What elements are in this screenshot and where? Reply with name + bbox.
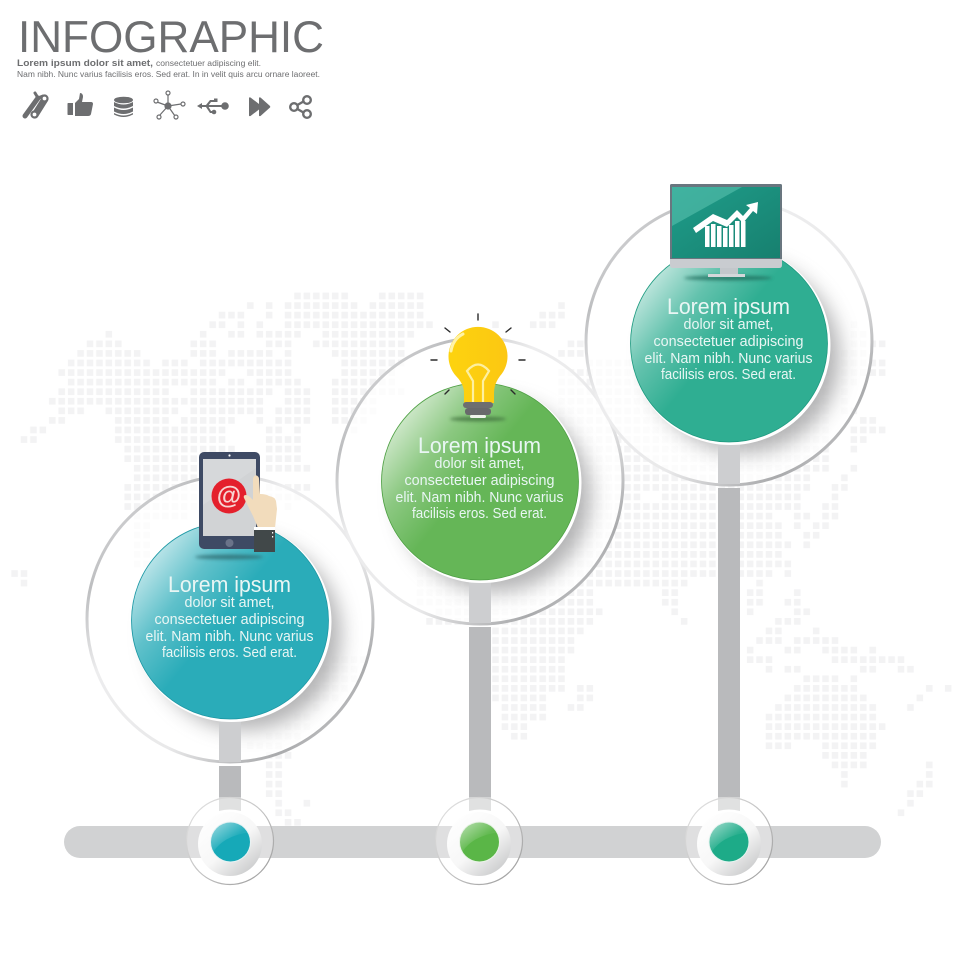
disc 3 text: dolor sit amet,	[684, 317, 774, 333]
timeline node 1	[186, 798, 274, 884]
disc 3 text: facilisis eros. Sed erat.	[661, 367, 796, 383]
disc 2 text: dolor sit amet,	[434, 456, 524, 472]
icon: thumbs up	[68, 93, 93, 116]
icon: monitor with rising chart	[670, 184, 782, 280]
connector stem 3	[718, 488, 740, 811]
light rays	[431, 314, 525, 394]
icon: usb symbol	[197, 98, 229, 114]
text disc 3	[630, 245, 830, 445]
subtitle text block: Nam nibh. Nunc varius facilisis eros. Sed erat. In in velit quis arcu ornare laoreet.	[17, 69, 320, 79]
icon: tablet with hand and at sign	[195, 452, 277, 560]
timeline node 3	[686, 798, 772, 884]
disc shadow 1	[149, 538, 341, 730]
disc 2 text: consectetuer adipiscing	[404, 473, 554, 489]
disc 3 text: elit. Nam nibh. Nunc varius	[644, 351, 812, 367]
disc 1 text	[146, 572, 314, 661]
timeline bar	[64, 826, 881, 858]
connector stem 2	[469, 627, 491, 811]
disc 1 text: facilisis eros. Sed erat.	[162, 645, 297, 661]
panel: step 2	[337, 314, 623, 811]
disc 2 text: facilisis eros. Sed erat.	[412, 506, 547, 522]
icon: network nodes	[154, 91, 185, 119]
disc 1 text: consectetuer adipiscing	[154, 612, 304, 628]
panel: step 3	[586, 184, 872, 811]
title: INFOGRAPHIC	[18, 13, 324, 62]
disc 1 text: dolor sit amet,	[184, 595, 274, 611]
disc 2 text: Lorem ipsum	[418, 433, 541, 458]
outer ring 1	[87, 476, 373, 762]
stem inside ring 1	[219, 715, 241, 762]
timeline node 2	[436, 798, 522, 884]
outer ring 2	[337, 338, 623, 624]
disc 3 text: consectetuer adipiscing	[654, 334, 804, 350]
panel: step 1	[87, 452, 373, 811]
outer ring 3	[586, 199, 872, 485]
world map of pale dots	[10, 291, 953, 827]
disc 3 text	[644, 294, 812, 383]
icon: share	[290, 96, 311, 118]
connector stem 1	[219, 766, 241, 811]
disc 1 text: elit. Nam nibh. Nunc varius	[146, 629, 314, 645]
text disc 2	[382, 383, 582, 583]
icon row	[25, 91, 311, 119]
disc 1 text: Lorem ipsum	[168, 572, 291, 597]
stem inside ring 2	[469, 575, 491, 623]
subtitle text block: consectetuer adipiscing elit.	[156, 58, 261, 68]
icon: light bulb	[431, 314, 525, 422]
stem inside ring 3	[718, 436, 740, 484]
icon: wrenches	[25, 93, 48, 118]
icon: tablet with hand and at sign: @	[217, 482, 241, 510]
text disc 1	[132, 522, 332, 722]
disc 3 text: Lorem ipsum	[667, 294, 790, 319]
subtitle text block	[17, 58, 320, 79]
disc 2 text: elit. Nam nibh. Nunc varius	[396, 490, 564, 506]
disc 2 text	[396, 433, 564, 522]
icon: database	[114, 97, 133, 117]
icon: fast forward	[249, 97, 270, 116]
subtitle text block: Lorem ipsum dolor sit amet,	[17, 58, 153, 69]
disc shadow 2	[399, 400, 591, 592]
chart bars and arrow	[693, 202, 758, 247]
disc shadow 3	[648, 261, 840, 453]
